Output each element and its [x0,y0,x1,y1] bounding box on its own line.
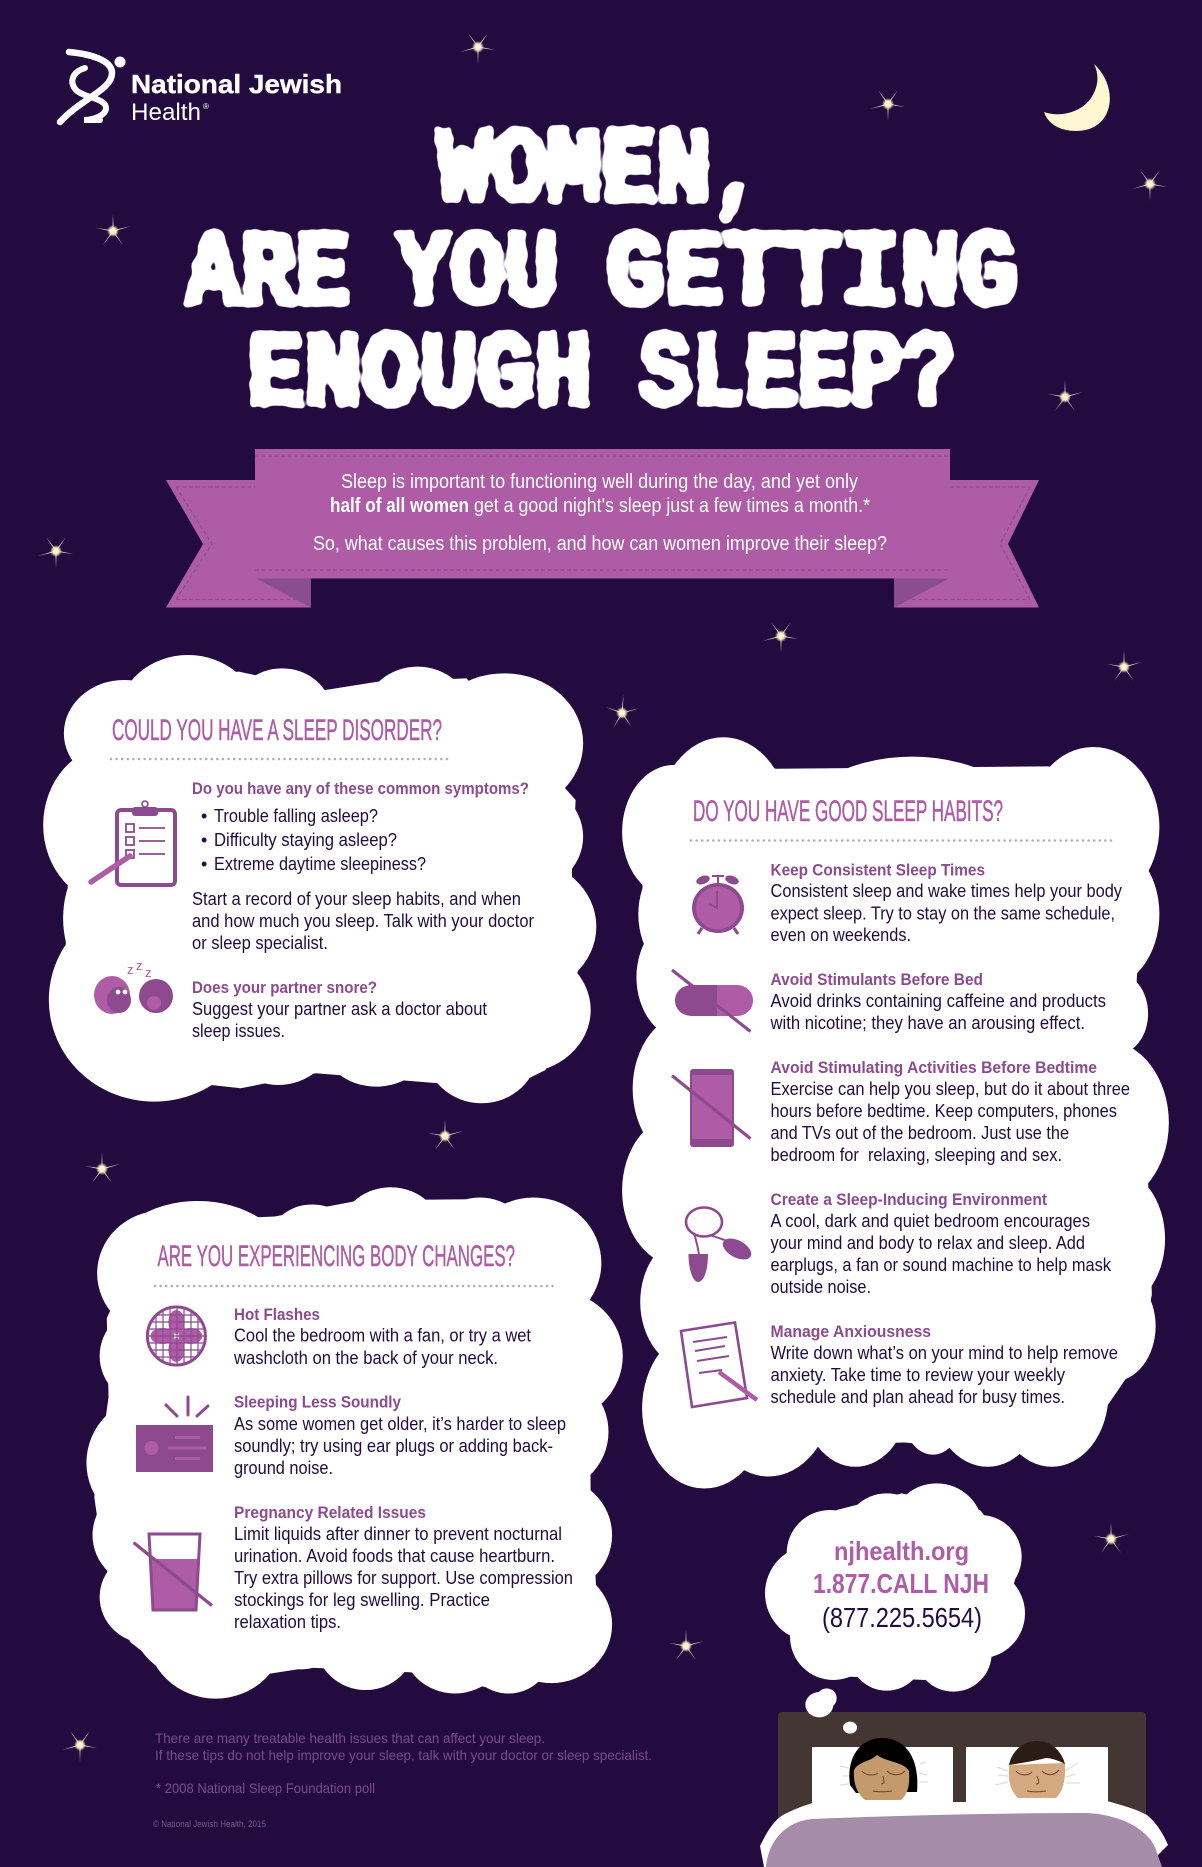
man sleeping [995,1741,1080,1798]
intro text [313,471,887,555]
body changes text: washcloth on the back of your neck. [233,1348,498,1368]
ribbon left tail [166,480,311,608]
habits text: anxiety. Take time to review your weekly [770,1365,1065,1385]
body changes text: relaxation tips. [234,1612,341,1632]
partner text: sleep issues. [192,1021,285,1041]
ribbon right tail [894,480,1039,608]
banner ribbon [166,449,1039,608]
symptoms text: • [201,806,207,826]
habits text: expect sleep. Try to stay on the same schedule, [770,904,1115,924]
icon: glass with slash [134,1534,212,1610]
body changes text: ground noise. [234,1458,333,1478]
footer notes: * 2008 National Sleep Foundation poll [156,1780,375,1796]
partner text [192,978,487,1041]
body changes text: Hot Flashes [234,1305,320,1324]
headboard [778,1712,1146,1824]
ribbon fold left [255,578,311,608]
body changes text: Sleeping Less Soundly [234,1393,401,1412]
footer notes [153,1730,652,1829]
habits text: bedroom for relaxing, sleeping and sex. [770,1145,1062,1165]
duvet [766,1813,1162,1867]
body changes text: stockings for leg swelling. Practice [234,1590,490,1610]
cloud shape [86,1187,623,1699]
intro text: half of all women [330,495,469,517]
icon: clipboard [91,801,175,885]
symptoms text: Extreme daytime sleepiness? [214,854,426,874]
habits text: Create a Sleep-Inducing Environment [770,1190,1047,1209]
intro text: get a good night's sleep just a few times a month.* [474,495,870,517]
body changes text: As some women get older, it’s harder to sleep [234,1414,566,1434]
intro text: Sleep is important to functioning well during the day, and yet only [341,471,858,493]
ribbon fold right [894,578,950,608]
partner text: Suggest your partner ask a doctor about [192,999,487,1019]
habits text: and TVs out of the bedroom. Just use the [770,1123,1069,1143]
cloud shape [765,1483,1025,1734]
heading: ARE YOU EXPERIENCING BODY CHANGES? [158,1240,515,1273]
habits text: schedule and plan ahead for busy times. [770,1387,1065,1407]
title: GETTING [606,215,1018,335]
icon: pill with slash [672,970,753,1032]
body changes text: Pregnancy Related Issues [234,1503,426,1522]
contact text [813,1536,989,1633]
panel: do you have good sleep habits [622,737,1169,1489]
habits text: hours before bedtime. Keep computers, phones [770,1101,1117,1121]
icon: crescent moon [1044,64,1110,131]
symptoms text: or sleep specialist. [192,933,328,953]
footer notes: If these tips do not help improve your sleep, talk with your doctor or sleep specialist. [155,1747,652,1763]
habits text: Avoid Stimulants Before Bed [770,970,983,989]
contact text: njhealth.org [834,1536,969,1566]
title: WOMEN, [437,112,766,232]
panel: could you have a sleep disorder [43,655,596,1103]
heading: COULD YOU HAVE A SLEEP DISORDER? [112,714,442,747]
habits text: even on weekends. [770,925,911,945]
body changes text: Limit liquids after dinner to prevent nocturnal [234,1524,562,1544]
symptoms text: • [201,830,207,850]
symptoms text: and how much you sleep. Talk with your doctor [192,911,534,931]
habits text: A cool, dark and quiet bedroom encourages [770,1211,1090,1231]
contact text: (877.225.5654) [822,1602,982,1633]
icon: snoring couple: z [127,962,134,977]
sheet [760,1801,1168,1867]
illustration: couple in bed [760,1712,1168,1867]
symptoms text: Do you have any of these common symptoms? [192,779,529,798]
symptoms text: Trouble falling asleep? [214,806,378,826]
contact text: 1.877.CALL NJH [813,1568,989,1599]
symptoms text: Start a record of your sleep habits, and when [192,889,521,909]
left pillow [812,1747,953,1807]
body changes text: Cool the bedroom with a fan, or try a wet [234,1326,531,1346]
partner text: Does your partner snore? [192,978,377,997]
icon: snoring couple [94,958,173,1014]
icon: sound machine [136,1397,213,1472]
habits text: Manage Anxiousness [770,1322,931,1341]
cloud shape [622,737,1169,1489]
title: ENOUGH [247,316,592,436]
icon: snoring couple: z [136,958,142,973]
title: ARE [186,215,350,335]
logo: National Jewish Health: National Jewish [131,69,342,99]
woman sleeping [840,1738,928,1800]
body changes text: soundly; try using ear plugs or adding back- [234,1436,553,1456]
icon: snoring couple: z [145,965,152,980]
habits text: Avoid Stimulating Activities Before Bedtime [770,1058,1097,1077]
footer notes: © National Jewish Health, 2015 [153,1819,266,1829]
habits text: earplugs, a fan or sound machine to help mask [770,1255,1112,1275]
logo: National Jewish Health: ® [203,102,209,111]
habits text: your mind and body to relax and sleep. Add [770,1233,1085,1253]
habits text: Avoid drinks containing caffeine and products [770,991,1106,1011]
body changes text: Try extra pillows for support. Use compression [234,1568,573,1588]
title: YOU [396,215,559,335]
symptoms text: Difficulty staying asleep? [214,830,397,850]
footer notes: There are many treatable health issues that can affect your sleep. [155,1730,545,1746]
symptoms text: • [201,854,207,874]
logo: National Jewish Health: Health [131,99,201,126]
icon: logo helix [60,52,126,122]
habits text: with nicotine; they have an arousing effect. [770,1013,1085,1033]
habits text [770,860,1130,1407]
body changes text: urination. Avoid foods that cause heartburn. [234,1546,555,1566]
icon: earplugs [686,1208,755,1282]
habits text: Keep Consistent Sleep Times [770,860,985,879]
habits text: Consistent sleep and wake times help your body [770,881,1122,901]
panel: are you experiencing body changes [86,1187,623,1699]
icon: notepad and pen [681,1322,757,1407]
icon: alarm clock [692,874,744,934]
habits text: Write down what’s on your mind to help remove [770,1343,1118,1363]
intro text: So, what causes this problem, and how can women improve their sleep? [313,533,887,555]
logo: National Jewish Health [60,52,342,126]
title: SLEEP? [639,316,956,436]
icon: fan [146,1306,207,1366]
symptoms text [192,779,534,953]
title [186,112,1018,436]
habits text: outside noise. [770,1277,871,1297]
right pillow [966,1747,1108,1807]
icon: phone with slash [672,1069,750,1147]
ribbon centre [255,449,950,578]
thought bubble: contact [765,1483,1025,1734]
body changes text [233,1305,573,1632]
cloud shape [43,655,596,1103]
habits text: Exercise can help you sleep, but do it about three [770,1079,1130,1099]
